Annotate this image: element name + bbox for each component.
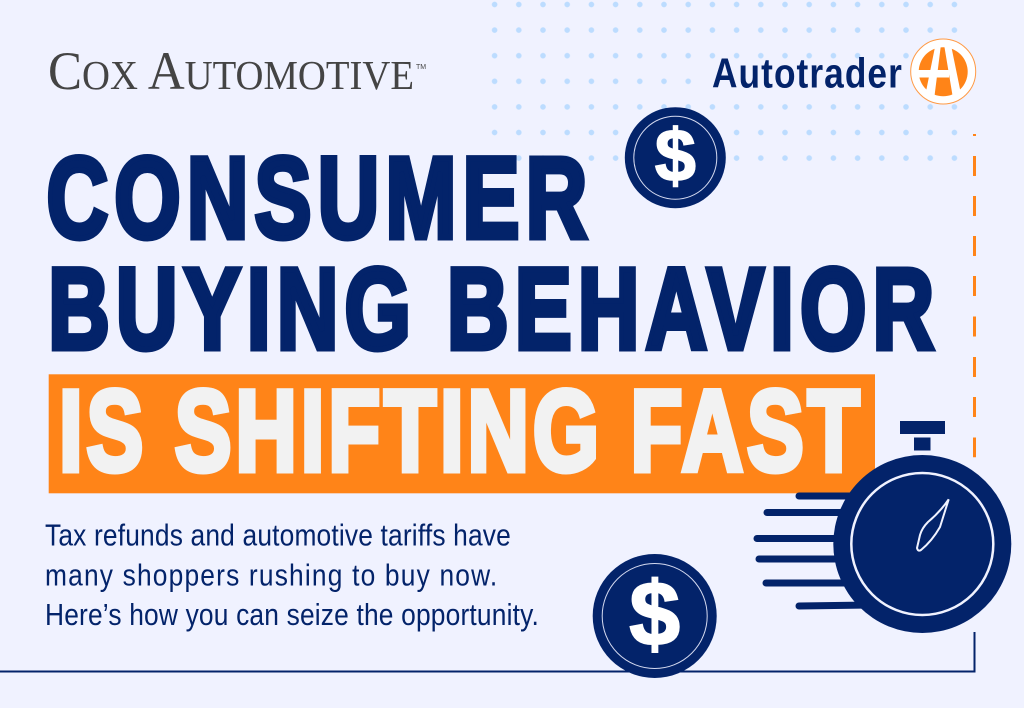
coin: top dollar: $ [655, 114, 696, 197]
logo: Cox Automotive: TM [416, 64, 426, 71]
title: consumer buying behavior: CONSUMER [47, 134, 587, 263]
title: consumer buying behavior [47, 134, 934, 374]
subtitle text: many shoppers rushing to buy now. [45, 559, 497, 593]
coin: bottom dollar [593, 554, 717, 678]
title highlight: is shifting fast: IS SHIFTING FAST [59, 367, 860, 496]
logo: Autotrader [712, 39, 976, 104]
logo: Autotrader: Autotrader [712, 51, 902, 97]
subtitle text: Here’s how you can seize the opportunity. [45, 598, 539, 633]
logo: Cox Automotive: COX AUTOMOTIVE [48, 41, 414, 101]
coin: top dollar [625, 107, 726, 208]
icon: stopwatch with speed lines [757, 421, 1011, 633]
subtitle text [45, 519, 539, 633]
subtitle text: Tax refunds and automotive tariffs have [45, 519, 511, 553]
coin: bottom dollar: $ [629, 564, 680, 665]
title: consumer buying behavior: BUYING BEHAVIOR [48, 245, 934, 374]
